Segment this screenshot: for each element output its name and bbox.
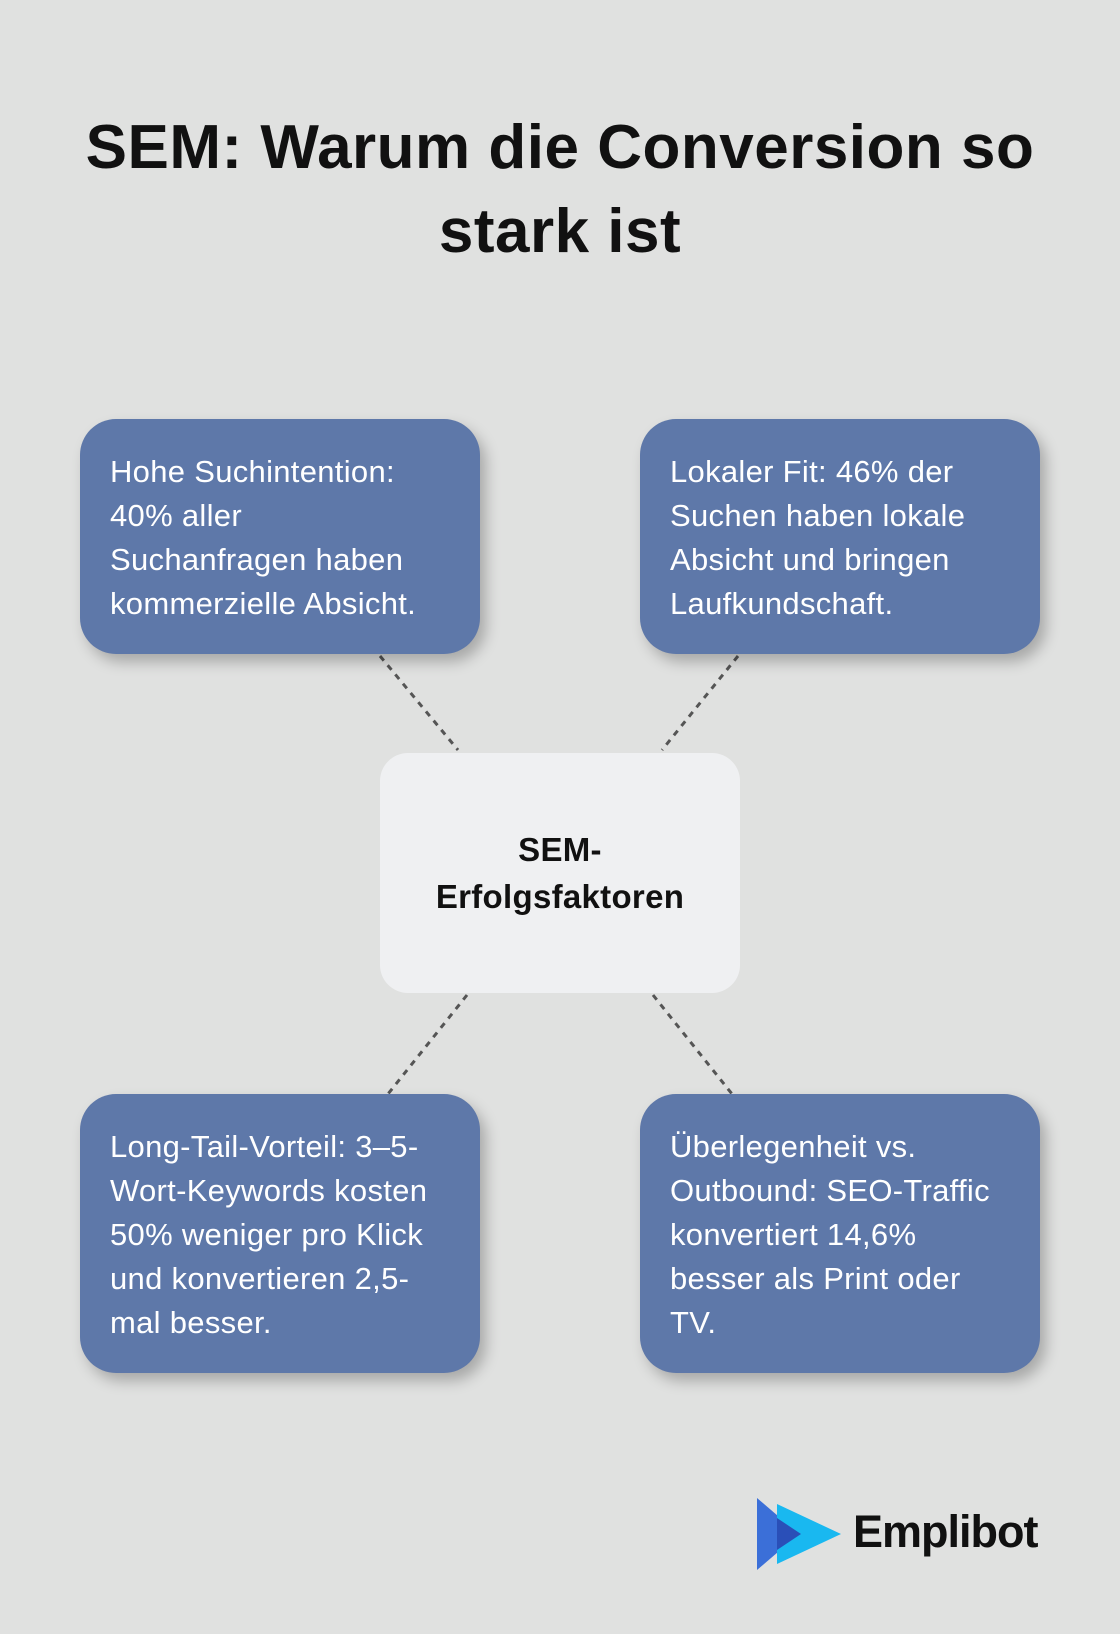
- panel: Überlegenheit vs. Outbound: Überlegenheit vs.: [670, 1129, 916, 1164]
- logo: Emplibot: Emplibot: [853, 1506, 1037, 1557]
- panel: Überlegenheit vs. Outbound: Outbound: SEO-Traffic: [670, 1173, 990, 1208]
- panel: Lokaler Fit: Laufkundschaft.: [670, 586, 893, 621]
- panel: Hohe Suchintention: Hohe Suchintention:: [110, 454, 395, 489]
- logo: Emplibot: [757, 1498, 1038, 1570]
- center node: SEM-: [518, 831, 602, 868]
- panel: Hohe Suchintention: [80, 419, 480, 654]
- panel: Long-Tail-Vorteil: und konvertieren 2,5-: [110, 1261, 409, 1296]
- panel: Lokaler Fit: [640, 419, 1040, 654]
- title: SEM: Warum die Conversion so: [86, 113, 1034, 182]
- panel: Hohe Suchintention: Suchanfragen haben: [110, 542, 403, 577]
- panel: Long-Tail-Vorteil: [80, 1094, 480, 1373]
- center node: Erfolgsfaktoren: [436, 878, 684, 915]
- panel: Long-Tail-Vorteil: mal besser.: [110, 1305, 272, 1340]
- panel: Überlegenheit vs. Outbound: konvertiert 14,6%: [670, 1217, 916, 1252]
- panel: Hohe Suchintention: kommerzielle Absicht.: [110, 586, 416, 621]
- panel: Long-Tail-Vorteil: Long-Tail-Vorteil: 3–5-: [110, 1129, 418, 1164]
- panel: Long-Tail-Vorteil: Wort-Keywords kosten: [110, 1173, 427, 1208]
- panel: Lokaler Fit: Absicht und bringen: [670, 542, 950, 577]
- panel: Hohe Suchintention: 40% aller: [110, 498, 242, 533]
- panel: Überlegenheit vs. Outbound: [640, 1094, 1040, 1373]
- panel: Lokaler Fit: Lokaler Fit: 46% der: [670, 454, 953, 489]
- panel: Long-Tail-Vorteil: 50% weniger pro Klick: [110, 1217, 423, 1252]
- title: stark ist: [439, 197, 681, 266]
- title: [86, 113, 1034, 266]
- panel: Überlegenheit vs. Outbound: besser als Print oder: [670, 1261, 961, 1296]
- panel: Überlegenheit vs. Outbound: TV.: [670, 1305, 716, 1340]
- center node: [380, 753, 740, 993]
- panel: Lokaler Fit: Suchen haben lokale: [670, 498, 965, 533]
